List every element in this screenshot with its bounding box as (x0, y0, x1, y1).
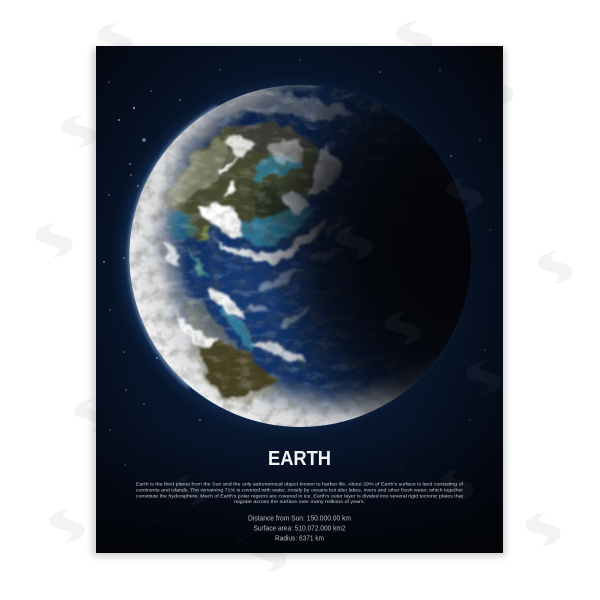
poster panel (96, 46, 503, 553)
description: continents and islands. The remaining 71% is covered with water, mostly by oceans but also lakes, rivers and other fresh water, which together (136, 488, 463, 492)
description: Earth is the third planet from the Sun and the only astronomical object known to harbor life. About 29% of Earth's surface is land consisting of (136, 482, 464, 487)
globe (129, 85, 472, 427)
poster shadow (93, 48, 505, 556)
noise clouds (136, 85, 430, 418)
night side shadow (231, 89, 472, 426)
scattered ocean clouds (246, 222, 339, 330)
shallow turquoise seas (167, 157, 313, 353)
description: constitute the hydrosphere. Much of Earth's polar regions are covered in ice. Earth's outer layer is divided into several rigid tectonic plates that (136, 493, 464, 498)
ocean (129, 90, 460, 407)
watermarks over panel (173, 177, 502, 506)
star field (103, 59, 491, 541)
description (136, 482, 464, 504)
land: north america (160, 124, 320, 243)
noise shadow texture (130, 86, 386, 427)
clouds: detail (163, 90, 353, 363)
sunlit crescent (129, 85, 453, 427)
title: EARTH (268, 448, 331, 470)
stats (248, 514, 351, 542)
stats: Radius: 6371 km (275, 534, 324, 542)
description: migrate across the surface over many millions of years. (234, 499, 365, 504)
atmosphere glow (110, 74, 474, 438)
stats: Surface area: 510.072.000 km2 (254, 524, 346, 532)
bright limb glow (131, 108, 218, 386)
land: south america (183, 293, 277, 405)
stats: Distance from Sun: 150.000.00 km (248, 514, 351, 522)
